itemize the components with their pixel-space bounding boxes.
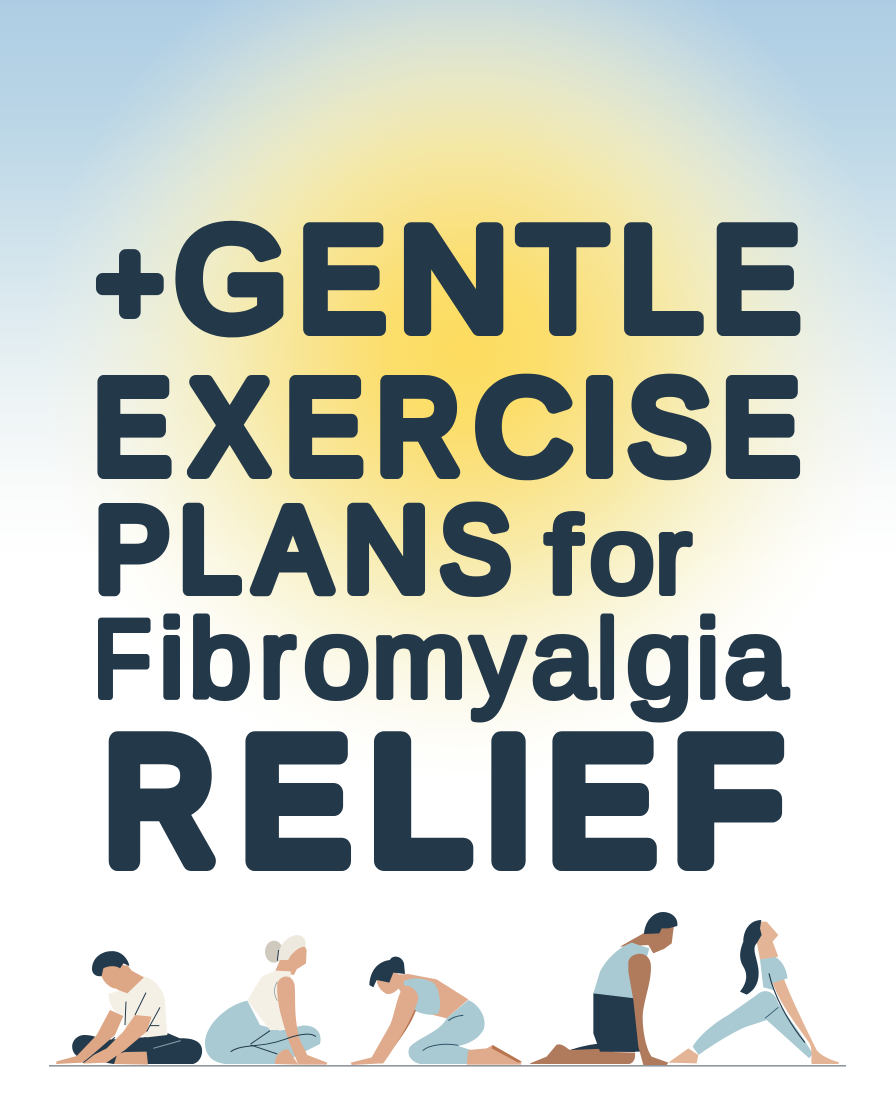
title line: Fibromyalgia: i xyxy=(697,598,719,720)
title line: +GENTLE: E xyxy=(299,198,385,360)
title line: RELIEF: E xyxy=(548,703,654,898)
background: sky gradient with yellow glow xyxy=(0,0,896,800)
title line: PLANS for: N xyxy=(344,483,429,615)
title line: +GENTLE: T xyxy=(519,198,607,360)
figure: man kneeling xyxy=(530,992,640,1064)
title line: EXERCISE: E xyxy=(286,354,362,500)
title line: +GENTLE: + xyxy=(97,220,162,347)
title line: +GENTLE: E xyxy=(712,198,800,360)
title line: PLANS for xyxy=(95,483,691,616)
title line: EXERCISE: X xyxy=(190,354,268,500)
title line: Fibromyalgia: a xyxy=(724,598,787,720)
title line: Fibromyalgia: g xyxy=(627,598,692,720)
illustration: exercise figures xyxy=(49,912,846,1067)
title line: RELIEF: R xyxy=(105,703,214,898)
title line: PLANS for: P xyxy=(95,483,170,615)
figure: older woman seated xyxy=(205,935,327,1065)
title line: EXERCISE xyxy=(94,354,799,500)
title line: +GENTLE xyxy=(97,198,800,360)
title line: PLANS for: f xyxy=(546,494,582,616)
title line: Fibromyalgia xyxy=(93,598,787,720)
title xyxy=(93,198,800,898)
title line: PLANS for: A xyxy=(255,483,331,615)
title line: +GENTLE: N xyxy=(399,198,508,360)
title line: RELIEF: L xyxy=(370,703,469,898)
title line: EXERCISE: S xyxy=(628,354,710,500)
title line: RELIEF: E xyxy=(242,703,349,898)
title line: Fibromyalgia: r xyxy=(260,598,295,720)
title line: RELIEF xyxy=(105,703,781,898)
title line: PLANS for: S xyxy=(440,483,510,615)
man torso and head xyxy=(593,912,677,1065)
woman stretching upward xyxy=(668,920,839,1064)
title line: EXERCISE: E xyxy=(723,354,799,500)
title line: +GENTLE: L xyxy=(619,198,702,360)
title line: EXERCISE: R xyxy=(377,354,459,500)
title line: +GENTLE: G xyxy=(175,198,287,360)
title line: PLANS for: r xyxy=(655,494,691,616)
title line: Fibromyalgia: y xyxy=(471,598,525,720)
title line: EXERCISE: I xyxy=(581,354,618,500)
title line: EXERCISE: C xyxy=(475,354,571,500)
title line: Fibromyalgia: i xyxy=(160,598,184,720)
title line: RELIEF: F xyxy=(673,703,781,898)
title line: PLANS for: L xyxy=(179,483,240,615)
title line: Fibromyalgia: F xyxy=(93,598,151,720)
title line: EXERCISE: E xyxy=(94,354,170,500)
title line: Fibromyalgia: l xyxy=(597,598,617,720)
figure: man seated forward fold xyxy=(56,951,202,1065)
title line: Fibromyalgia: o xyxy=(304,598,370,720)
figure: woman on all fours xyxy=(351,957,522,1065)
floor line xyxy=(49,1065,846,1067)
title line: RELIEF: I xyxy=(486,703,531,898)
title line: Fibromyalgia: m xyxy=(372,598,466,720)
title line: PLANS for: o xyxy=(590,494,654,616)
title line: Fibromyalgia: b xyxy=(189,598,251,720)
title line: Fibromyalgia: a xyxy=(532,598,594,720)
